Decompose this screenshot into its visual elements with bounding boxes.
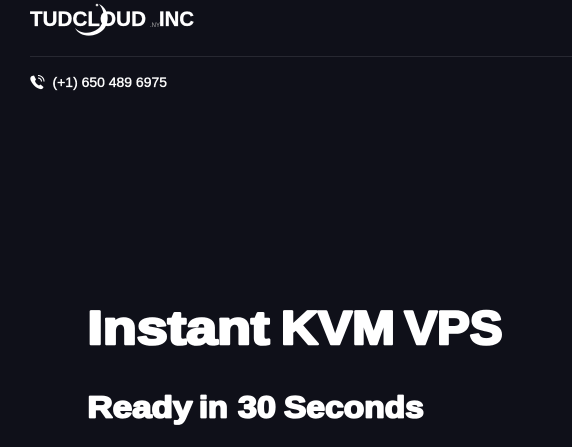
heading word: VPS: VPS bbox=[404, 301, 502, 354]
phone number: (+1) 650 489 6975 bbox=[52, 74, 167, 90]
logo swoosh bbox=[75, 4, 108, 36]
logo suffix: INC bbox=[159, 7, 194, 31]
logo: TUDCLOUD .INC bbox=[30, 4, 194, 36]
heading word: KVM: KVM bbox=[281, 301, 395, 354]
subheading word: 30: 30 bbox=[238, 390, 276, 424]
logo wordmark: TUDCLOUD bbox=[30, 7, 146, 31]
contact phone row bbox=[30, 74, 167, 90]
icon: phone bbox=[30, 76, 44, 89]
subheading word: Seconds: Seconds bbox=[284, 390, 424, 424]
heading: Instant KVM VPS bbox=[88, 301, 502, 354]
logo star bbox=[96, 4, 98, 6]
subheading word: Ready: Ready bbox=[88, 390, 193, 424]
heading word: Instant: Instant bbox=[88, 301, 270, 354]
logo small mark: .NY bbox=[150, 23, 160, 29]
subheading word: in: in bbox=[199, 390, 228, 424]
subheading: Ready in 30 Seconds bbox=[88, 390, 424, 424]
